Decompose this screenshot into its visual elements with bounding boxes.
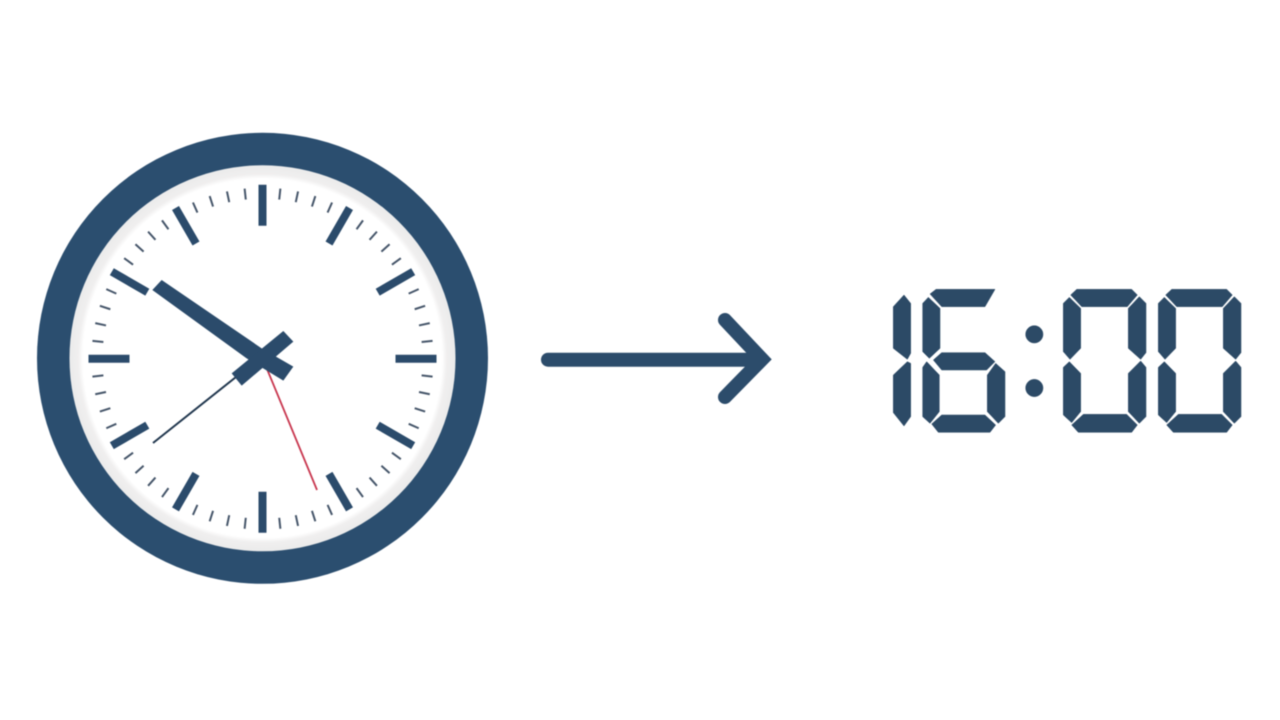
arrow pointing right — [548, 320, 762, 397]
minute tick marks — [92, 189, 433, 529]
digital time display: 16:00 — [892, 259, 1242, 471]
clock hands — [152, 280, 293, 386]
icon: analog wall clock — [37, 133, 488, 584]
minute hand — [152, 280, 293, 381]
digit 0 (minutes) — [1158, 289, 1241, 432]
hour tick marks — [88, 185, 436, 533]
colon — [1026, 326, 1043, 397]
seven-segment digits — [893, 289, 1241, 432]
digit 1 — [893, 295, 911, 426]
digit 0 (tens of minutes) — [1063, 289, 1146, 432]
red second hand — [267, 369, 317, 490]
hour hand — [232, 331, 293, 386]
clock face with soft grey rim — [70, 165, 456, 551]
clock outer ring — [37, 133, 488, 584]
digit 6 — [923, 289, 1005, 432]
thin dark counterweight hand — [153, 377, 236, 443]
